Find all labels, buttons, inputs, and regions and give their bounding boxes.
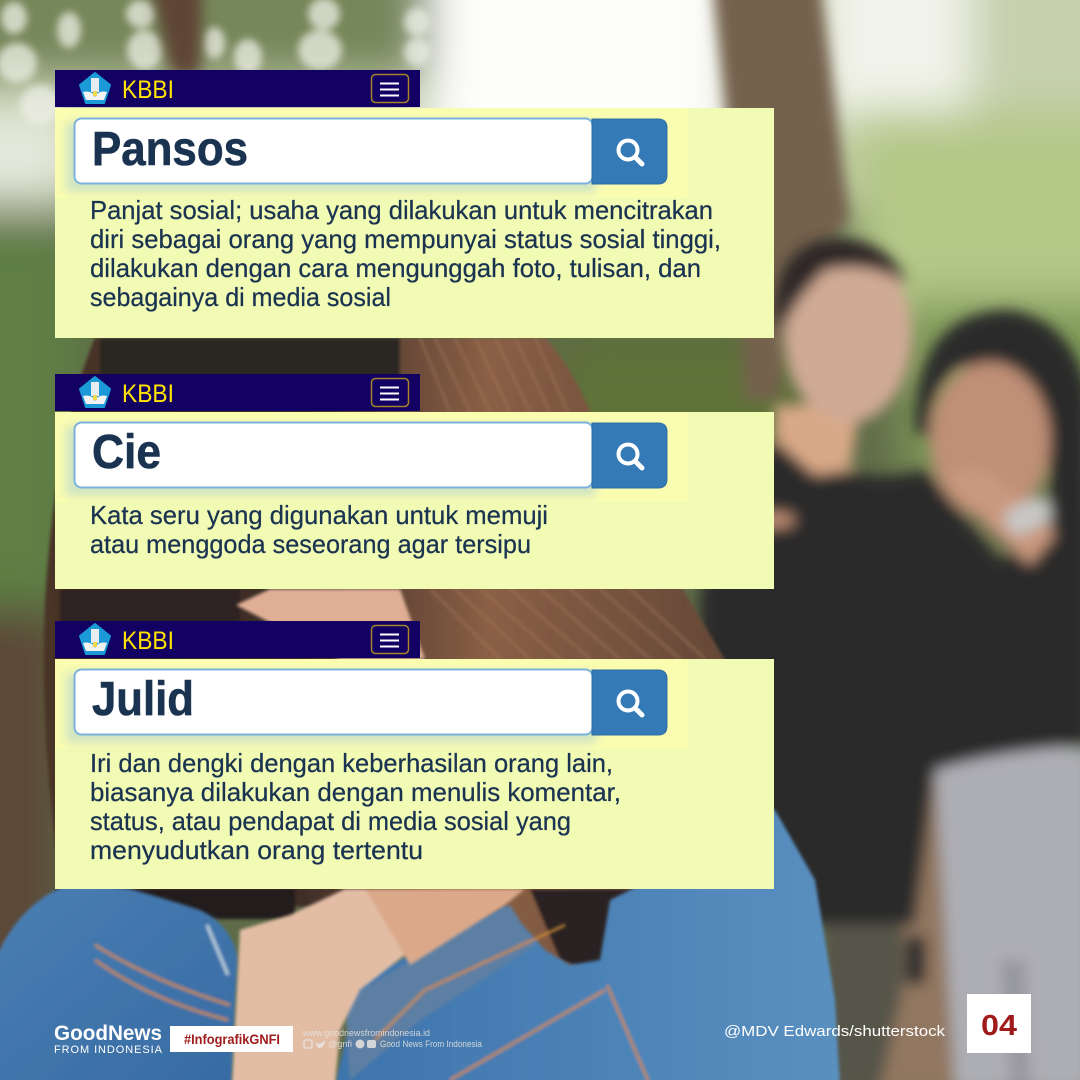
yellow glow behind search bar: [55, 412, 688, 502]
KBBI header bar: KBBI: [122, 76, 174, 104]
definition text: [90, 748, 621, 865]
footer logo: GoodNews From Indonesia: GoodNews: [54, 1022, 162, 1045]
panel: Pansos: [55, 70, 774, 338]
definition text: menyudutkan orang tertentu: [90, 835, 423, 865]
main girl skin: [232, 589, 525, 1080]
panel background: [55, 412, 774, 589]
definition text: diri sebagai orang yang mempunyai status sosial tinggi,: [90, 224, 721, 254]
page number: [967, 994, 1031, 1053]
panel background: [55, 659, 774, 889]
footer logo: GoodNews From Indonesia: FROM INDONESIA: [54, 1044, 163, 1056]
main girl hair: [44, 338, 760, 990]
KBBI header bar: KBBI: [122, 380, 174, 408]
main girl denim jacket: [0, 790, 840, 1080]
bokeh highlights: [0, 0, 430, 125]
definition text: dilakukan dengan cara mengunggah foto, tulisan, dan: [90, 253, 701, 283]
hashtag label: #InfografikGNFI: [184, 1031, 280, 1047]
hashtag label: [170, 1026, 293, 1052]
search bar: [74, 670, 667, 735]
page number: 04: [981, 1010, 1017, 1042]
KBBI header bar: [55, 374, 420, 411]
KBBI header bar: [55, 70, 420, 107]
search bar: Julid: [92, 673, 194, 726]
footer website and social links: Good News From Indonesia: [380, 1039, 482, 1049]
panel: Cie: [55, 374, 774, 589]
panel background: [55, 108, 774, 338]
footer website and social links: www.goodnewsfromindonesia.id: [302, 1028, 430, 1038]
photo credit: @MDV Edwards/shutterstock: [724, 1023, 946, 1040]
search bar: Cie: [92, 426, 161, 479]
footer logo: GoodNews From Indonesia: [54, 1022, 163, 1056]
KBBI header bar: KBBI: [122, 627, 174, 655]
definition text: Panjat sosial; usaha yang dilakukan untuk mencitrakan: [90, 195, 713, 225]
panel: Julid: [55, 621, 774, 889]
yellow glow behind search bar: [55, 108, 688, 198]
KBBI header bar: [55, 621, 420, 658]
search bar: [74, 118, 667, 184]
definition text: atau menggoda seseorang agar tersipu: [90, 529, 531, 559]
search bar: [74, 422, 667, 488]
background tree trunks: [150, 0, 850, 400]
footer website and social links: @gnfi: [328, 1039, 352, 1049]
definition text: sebagainya di media sosial: [90, 282, 391, 312]
definition text: [90, 500, 548, 559]
definition text: biasanya dilakukan dengan menulis komentar,: [90, 777, 621, 807]
definition text: [90, 195, 721, 312]
blurred girls in the background: [700, 238, 1080, 1080]
definition text: Iri dan dengki dengan keberhasilan orang lain,: [90, 748, 613, 778]
definition text: Kata seru yang digunakan untuk memuji: [90, 500, 548, 530]
footer website and social links: [302, 1028, 482, 1049]
definition text: status, atau pendapat di media sosial yang: [90, 806, 571, 836]
yellow glow behind search bar: [55, 659, 688, 749]
search bar: Pansos: [92, 123, 248, 176]
